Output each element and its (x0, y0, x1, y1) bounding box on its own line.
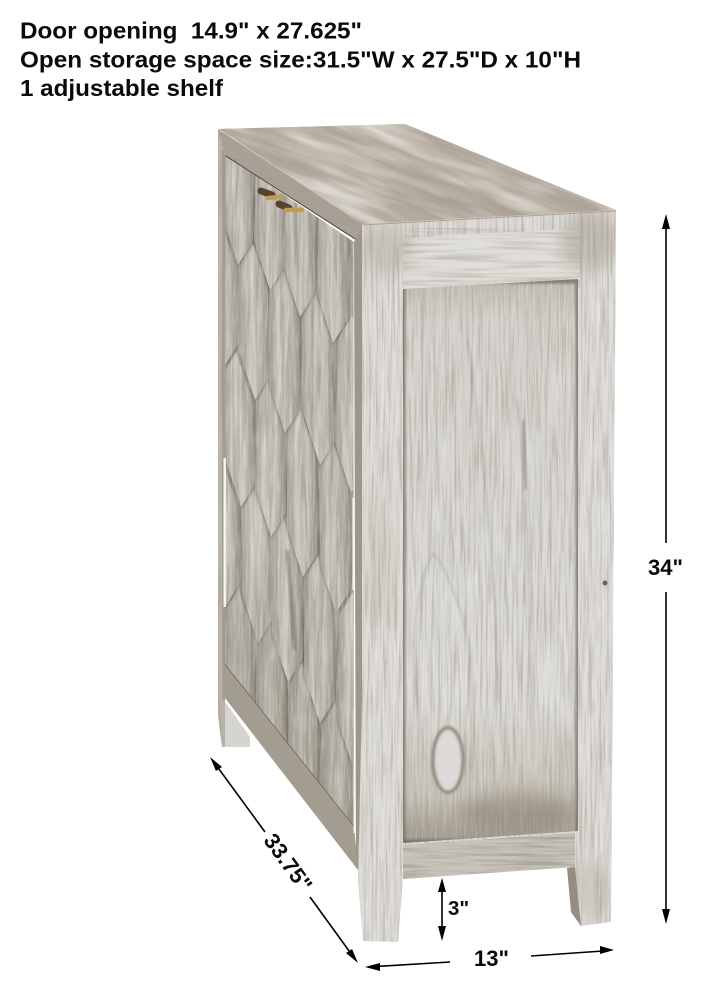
knot mark on right leg (602, 580, 608, 586)
front frame and legs (355, 205, 620, 945)
front top edge stain (362, 211, 616, 225)
depth dimension arrow: 33.75" (210, 757, 358, 963)
lower apron (222, 660, 362, 872)
cabinet top (219, 124, 616, 224)
door white gaps (224, 244, 356, 833)
height dimension arrow: 34": 34" (648, 555, 683, 580)
scales row 2 (222, 352, 351, 613)
wood grain cathedral (415, 340, 532, 770)
scales row 4 (225, 589, 354, 824)
side panel (400, 275, 582, 845)
scales top row (225, 156, 351, 345)
header specifications text (20, 18, 581, 101)
upper apron under top (218, 129, 362, 240)
brass handles (261, 191, 302, 210)
panel edge shadow (403, 281, 578, 842)
lower front rail (403, 833, 575, 879)
door face with scale pattern (225, 156, 354, 825)
width dimension arrow: 13": 13" (474, 946, 509, 971)
leg height dimension arrow: 3" (438, 878, 469, 941)
dark strip by front post (354, 226, 363, 872)
left back leg and side strip (218, 130, 250, 747)
depth dimension arrow: 33.75": 33.75" (259, 829, 317, 896)
top front rail (403, 228, 580, 290)
knot (433, 728, 463, 792)
scales row 3 (225, 471, 354, 767)
header specifications text: 1 adjustable shelf (20, 75, 223, 101)
header specifications text: Door opening 14.9" x 27.625" (20, 18, 362, 44)
cabinet photo (218, 124, 616, 942)
scales row 1 (225, 234, 354, 495)
leg height dimension arrow: 3": 3" (448, 897, 469, 920)
header specifications text: Open storage space size:31.5"W x 27.5"D x 10"H (20, 46, 581, 72)
width dimension arrow: 13" (365, 946, 614, 971)
inner face of right leg (567, 867, 581, 926)
height dimension arrow: 34" (648, 214, 683, 924)
